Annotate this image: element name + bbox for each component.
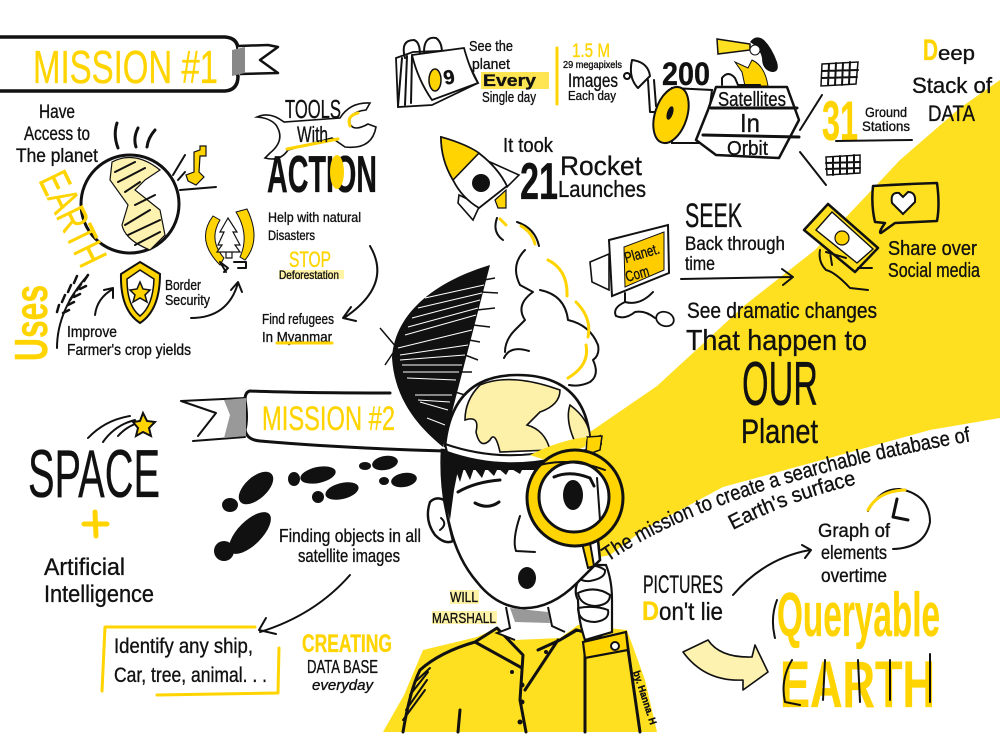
icon: hand holding tablet [804,204,878,290]
label: will marshall: WILL [450,589,478,606]
text: finding objects: satellite images [298,546,400,566]
icon: globe with key [81,123,216,253]
text: find refugees: Find refugees [262,311,334,328]
text: 1.5M images each day [557,41,622,104]
text: graph of elements overtime: Graph of [818,521,891,542]
text: 1.5M images each day: Each day [568,88,616,103]
heading: space plus artificial intelligence [28,436,160,608]
stat: 31 ground stations: 31 [822,89,858,152]
text: share over social media [888,238,981,282]
icon: satellite [624,60,826,185]
icon: computer monitor: Com [623,263,651,286]
text: find refugees: In Myanmar [262,329,332,346]
text: see the planet every single day [469,38,549,106]
title banner: mission 1: MISSION #1 [33,41,218,93]
icon: forest protect [205,209,254,272]
text: see dramatic changes: See dramatic changes [687,298,877,323]
text: share over social media: Share over [888,238,977,260]
credit: by. Hanna. H [630,670,658,726]
heading: queryable earth [773,581,940,721]
icon: computer monitor: Planet. [622,241,662,267]
text: border security: Border [165,277,201,294]
text: have access to the planet: Have [39,102,75,123]
stat: 31 ground stations [822,89,912,152]
character face [428,450,600,640]
text: see dramatic changes: Planet [741,413,818,451]
icon: solar panels [821,62,860,175]
box: identify any ship: Identify any ship, [114,635,253,658]
label: 200: 200 [662,56,710,92]
text: seek back through time: Back through [685,234,785,255]
icon: wrench with tools heading: TOOLS [285,94,341,124]
text: deep stack of data [912,34,993,126]
arrow: to identify box [259,575,350,634]
label: uses: Uses [5,285,57,361]
text: creating data base everyday: CREATING [302,630,392,658]
text: it took 21 rocket launches [503,135,646,211]
icon: woman with telescope [717,37,778,86]
box: identify any ship [102,627,279,695]
brain globe dome [445,375,602,463]
heading: action: ACTION [267,146,377,204]
text: deep stack of data: DATA [928,101,975,126]
text: help with natural disasters: Disasters [268,227,315,243]
heading: space plus artificial intelligence: Intelligence [44,581,154,608]
label: will marshall: MARSHALL [432,610,496,627]
text: seek back through time: SEEK [685,197,742,235]
stat: 31 ground stations: Stations [862,118,910,134]
text: border security [165,277,210,309]
icon: wrench with tools heading [257,94,376,159]
label: will marshall [432,589,497,627]
text: help with natural disasters: Help with natural [268,209,361,225]
text: see the planet every single day: Single day [482,89,536,106]
text: creating data base everyday [302,630,392,694]
text: see dramatic changes [686,298,877,451]
text: it took 21 rocket launches: Rocket [560,151,642,181]
title banner: mission 2: MISSION #2 [262,400,395,438]
text: pictures don't lie [642,571,723,626]
text: deep stack of data: D [923,34,938,67]
text: deep stack of data: Stack of [912,73,993,98]
text: border security: Security [165,292,210,309]
text: 1.5M images each day: Images [568,71,618,92]
icon: heart speech bubble [872,183,938,233]
label: earth: EARTH [30,163,116,274]
text: see the planet every single day: Every [483,71,537,90]
text: graph of elements overtime [818,521,891,587]
yellow brush wedge background [522,80,1000,560]
icon: calendar [396,38,478,107]
text: have access to the planet: Access to [24,124,90,145]
text: see the planet every single day: planet [472,56,511,73]
text: improve crop yields: Farmer's crop yields [67,342,191,359]
text: mission statement on curve: The mission to create a searchable database of [600,426,970,560]
text: 1.5M images each day: 29 megapixels [563,60,622,71]
arrow: to queryable earth [683,640,768,690]
text: improve crop yields: Improve [67,324,117,341]
icon: satellite: Satellites [718,89,786,111]
text: see dramatic changes: That happen to [686,325,867,357]
magnifying glass [527,450,623,568]
text: find refugees [262,311,334,346]
heading: space plus artificial intelligence: SPACE [28,436,160,512]
text: pictures don't lie: D [642,596,659,626]
text: seek back through time [685,197,785,275]
icon: wrench with tools heading: With [297,122,328,147]
text: seek back through time: time [685,254,715,275]
icon: shield with star [121,262,160,323]
text: deep stack of data: eep [938,43,975,65]
text: stop deforestation [279,247,344,282]
arrow: crop to shield [95,288,113,315]
heading: space plus artificial intelligence: Artificial [44,554,125,581]
icon: wheat [57,275,88,348]
text: stop deforestation: STOP [289,247,331,272]
text: creating data base everyday: everyday [312,677,374,694]
text: graph of elements overtime: elements [821,543,887,564]
cuff and hand [574,565,628,658]
arrow: seek [681,269,793,285]
text: pictures don't lie: PICTURES [643,571,723,599]
icon: rocket [441,137,519,220]
text: it took 21 rocket launches: Launches [558,176,646,202]
text: have access to the planet: The planet [16,146,99,167]
text: stop deforestation: Deforestation [279,268,339,282]
stat: 31 ground stations: Ground [865,104,907,120]
icon: satellite: Orbit [727,138,768,160]
heading: action [267,146,377,204]
text: see the planet every single day: See the [469,38,513,55]
text: help with natural disasters [268,209,361,243]
arrow: shield to tree [191,282,242,318]
arrow: to refugees [343,246,377,321]
text: improve crop yields [67,324,191,359]
text: share over social media: Social media [888,260,981,282]
icon: calendar: 9 [441,66,457,90]
icon: exhaust cloud [495,218,598,386]
hair half dome [380,262,510,447]
icon: shooting star [88,413,155,442]
text: 1.5M images each day: 1.5 M [572,41,610,62]
text: see dramatic changes: OUR [742,350,818,419]
text: have access to the planet [16,102,99,167]
text: it took 21 rocket launches: 21 [520,153,558,211]
arrow: pictures to graph [733,545,811,595]
text: creating data base everyday: DATA BASE [307,657,378,677]
shirt [383,625,657,732]
text: mission statement on curve: Earth's surface [728,474,855,530]
box: identify any ship: Car, tree, animal. . . [114,664,267,687]
icon: clock [868,489,930,549]
text: pictures don't lie: on't lie [659,598,723,626]
icon: footprints [214,454,418,561]
text: graph of elements overtime: overtime [821,566,887,587]
icon: satellite: In [740,108,760,138]
title banner: mission 2 [181,391,445,451]
icon: computer monitor [590,225,676,329]
text: it took 21 rocket launches: It took [503,135,554,157]
text: finding objects: Finding objects in all [279,526,421,546]
text: finding objects [279,526,421,566]
